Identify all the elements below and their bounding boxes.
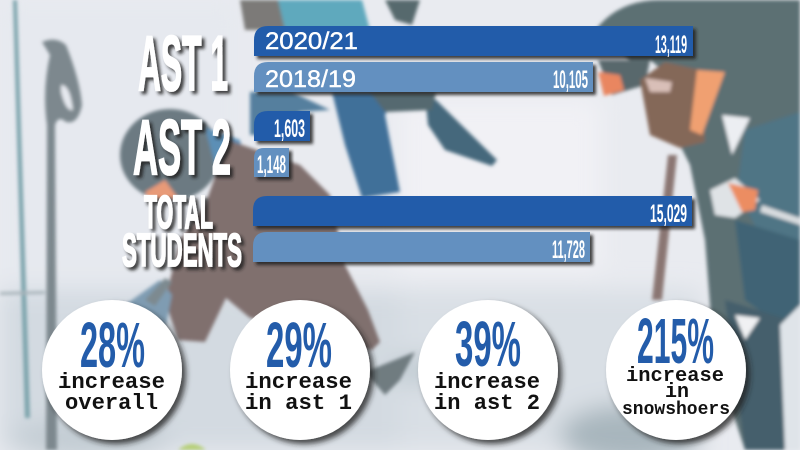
bar: total 2018/19 [253, 232, 590, 264]
ski pole grip [42, 40, 82, 450]
callout: 39% increase in ast 2: increase [434, 370, 540, 395]
bar: AST 1 2020/21: 2020/21 [265, 28, 358, 55]
callout: 29% increase in ast 1: 29% [266, 309, 332, 381]
bar: total 2020/21: 15,029 [650, 200, 687, 228]
ski pole thin [13, 0, 30, 418]
bar: AST 1 2018/19: 10,105 [553, 66, 588, 94]
shovel blade [425, 94, 497, 166]
bar: AST 1 2018/19: 2018/19 [265, 66, 356, 93]
lower right boot shapes [725, 300, 800, 450]
bar: AST 1 2020/21: 13,119 [655, 31, 687, 59]
heading: total students: TOTAL [144, 186, 213, 238]
callout: 29% increase in ast 1: in ast 1 [245, 391, 352, 416]
callout: 28% increase overall: overall [65, 391, 158, 416]
callout: 28% increase overall: 28% [80, 309, 145, 381]
person right [597, 0, 800, 450]
bar: AST 2 2018/19 [254, 148, 289, 179]
callout: 39% increase in ast 2: in ast 2 [434, 391, 540, 416]
bar: total 2018/19: 11,728 [552, 236, 585, 264]
heading: total students [122, 186, 242, 276]
callout: 215% increase in snowshoers: in [665, 381, 689, 404]
callout: 215% increase in snowshoers: increase [626, 365, 724, 388]
callout: 29% increase in ast 1 [230, 300, 370, 440]
callout: 29% increase in ast 1: increase [245, 370, 352, 395]
bar: total 2020/21 [253, 196, 692, 228]
bar: AST 2 2020/21 [254, 111, 310, 143]
bar: AST 1 2018/19 [254, 62, 593, 94]
text: STUDENTS [122, 224, 242, 276]
body of lower-left person [165, 140, 380, 350]
person top centre [240, 0, 285, 30]
text: AST 2 [133, 103, 231, 191]
callout: 28% increase overall: increase [58, 370, 165, 395]
bar: AST 2 2020/21: 1,603 [274, 115, 305, 143]
callout: 39% increase in ast 2: 39% [455, 308, 521, 380]
snowshoe [365, 352, 415, 395]
bar: AST 1 2020/21 [254, 26, 693, 59]
callout: 28% increase overall [42, 300, 182, 440]
callout: 215% increase in snowshoers: 215% [637, 305, 714, 377]
helmet lower-left person [120, 109, 220, 201]
callout: 215% increase in snowshoers: snowshoers [622, 400, 730, 420]
bar: AST 2 2018/19: 1,148 [257, 151, 286, 179]
callout: 39% increase in ast 2 [418, 300, 558, 440]
callout: 215% increase in snowshoers [606, 300, 746, 440]
text: AST 1 [138, 19, 228, 107]
